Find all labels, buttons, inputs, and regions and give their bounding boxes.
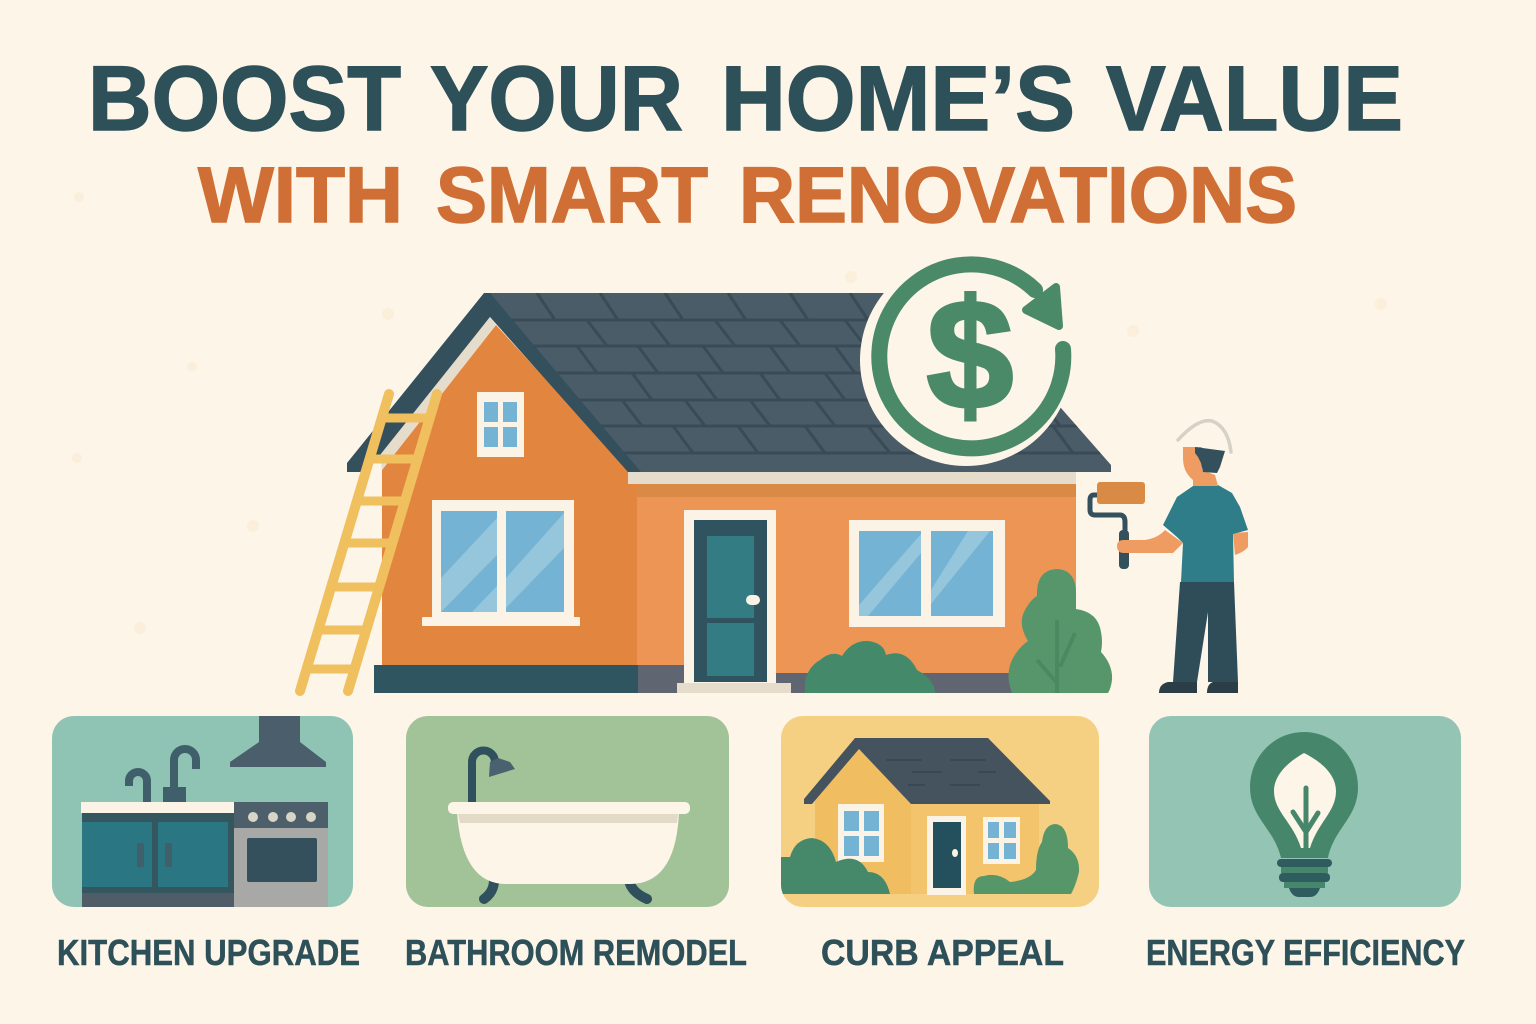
bushes: [781, 824, 1079, 894]
title line 2: [198, 150, 1297, 239]
panel: kitchen upgrade: [52, 716, 353, 907]
small house door: [927, 816, 966, 895]
faucets: [129, 749, 196, 802]
icon: dollar value cycle: [860, 254, 1072, 466]
title line 1: [88, 48, 1403, 150]
range hood: [230, 716, 326, 767]
house illustration: [300, 293, 1112, 693]
paint roller: [1090, 482, 1145, 569]
title line 1: YOUR: [430, 48, 683, 150]
panel: energy efficiency: [1149, 716, 1461, 907]
title line 2: WITH: [198, 150, 403, 239]
small house window right: [983, 817, 1020, 864]
bush small: [805, 641, 935, 693]
title line 2: RENOVATIONS: [739, 150, 1297, 239]
house walls: [374, 325, 1076, 693]
cabinet: [81, 802, 234, 907]
ladder: [300, 394, 437, 691]
title: [88, 48, 1403, 239]
label: bathroom remodel: BATHROOM REMODEL: [405, 932, 747, 973]
panel: curb appeal: [781, 716, 1099, 907]
worker legs: [1159, 582, 1238, 693]
title line 1: HOME’S: [721, 48, 1075, 150]
title line 1: BOOST: [88, 48, 401, 150]
worker head: [1178, 421, 1231, 486]
front door: [677, 510, 791, 693]
worker torso: [1163, 485, 1248, 582]
icon: dollar value cycle: $: [927, 268, 1013, 441]
gable window: [477, 392, 524, 457]
bathtub: [448, 802, 690, 899]
shower: [472, 750, 515, 802]
label: energy efficiency: ENERGY EFFICIENCY: [1146, 932, 1465, 973]
right window: [849, 520, 1005, 627]
title line 1: VALUE: [1106, 48, 1403, 150]
bush large: [1008, 569, 1112, 693]
worker with paint roller: [1090, 421, 1248, 693]
small house window left: [838, 804, 884, 862]
worker arms: [1117, 530, 1248, 555]
panel: bathroom remodel: [406, 716, 729, 907]
small house: [804, 738, 1050, 895]
icon: light bulb with leaf: [1250, 732, 1358, 897]
left window: [422, 500, 580, 626]
stove: [234, 802, 328, 907]
title line 2: SMART: [436, 150, 708, 239]
label: kitchen upgrade: KITCHEN UPGRADE: [57, 932, 360, 973]
roof: [347, 293, 1111, 472]
label: curb appeal: CURB APPEAL: [821, 932, 1064, 973]
